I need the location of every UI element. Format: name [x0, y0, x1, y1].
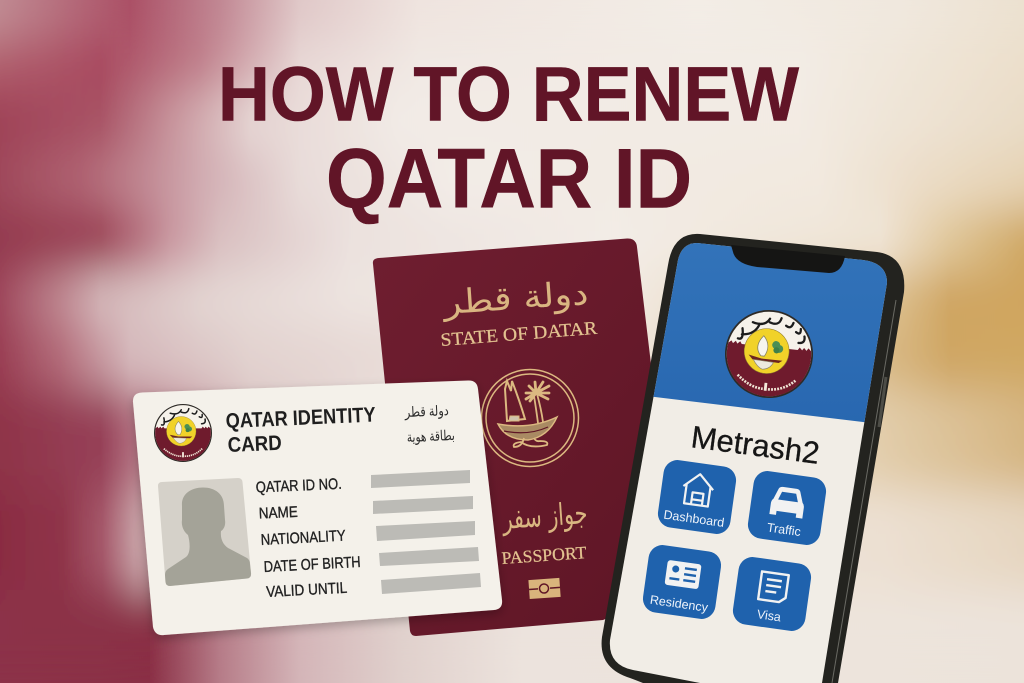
passport state name: STATE OF DATAR: [440, 319, 599, 351]
app tile: dashboard: [656, 458, 738, 536]
title: [218, 52, 799, 226]
visa label: Visa: [756, 607, 782, 624]
title: QATAR ID: [326, 132, 692, 226]
card field labels: DATE OF BIRTH: [263, 554, 361, 576]
house icon: [681, 472, 715, 507]
app tile: residency: [641, 543, 723, 621]
passport: [373, 238, 678, 636]
residency label: Residency: [649, 593, 710, 615]
phone notch: [731, 245, 845, 273]
passport emblem: [482, 370, 578, 466]
app emblem: [721, 306, 817, 402]
title: HOW TO RENEW: [218, 52, 799, 138]
passport chip icon: [528, 578, 561, 599]
passport word: PASSPORT: [501, 542, 587, 568]
card field labels: NAME: [258, 504, 298, 522]
smartphone: [600, 230, 904, 683]
car icon: [769, 486, 806, 519]
card field bars: [371, 470, 481, 594]
card field labels: VALID UNTIL: [266, 580, 348, 601]
dashboard label: Dashboard: [663, 508, 725, 530]
app tile: visa: [731, 555, 813, 633]
card title: CARD: [227, 432, 282, 457]
card arabic text: بطاقة هوية: [406, 427, 455, 446]
card emblem: [154, 404, 212, 462]
card title: QATAR IDENTITY: [225, 403, 376, 433]
app tile: traffic: [746, 469, 828, 547]
passport arabic label: جواز سفر: [500, 496, 589, 537]
phone bezel highlight: [832, 300, 896, 683]
phone screen: [610, 243, 887, 683]
phone side button: [879, 377, 886, 427]
passport arabic heading: دولة قطر: [440, 273, 590, 322]
card field labels: NATIONALITY: [260, 528, 346, 549]
traffic label: Traffic: [766, 520, 802, 539]
card photo: [158, 478, 251, 586]
card arabic text: [404, 402, 455, 446]
card arabic text: دولة قطر: [404, 402, 449, 421]
identity card: [133, 380, 502, 635]
photo silhouette: [165, 488, 251, 586]
app name: Metrash2: [689, 419, 822, 471]
id card icon: [664, 560, 702, 589]
card field labels: [255, 476, 361, 601]
phone screen blue header: [654, 243, 887, 422]
card title: [225, 403, 376, 457]
card field labels: QATAR ID NO.: [255, 476, 342, 496]
document icon: [758, 571, 789, 603]
